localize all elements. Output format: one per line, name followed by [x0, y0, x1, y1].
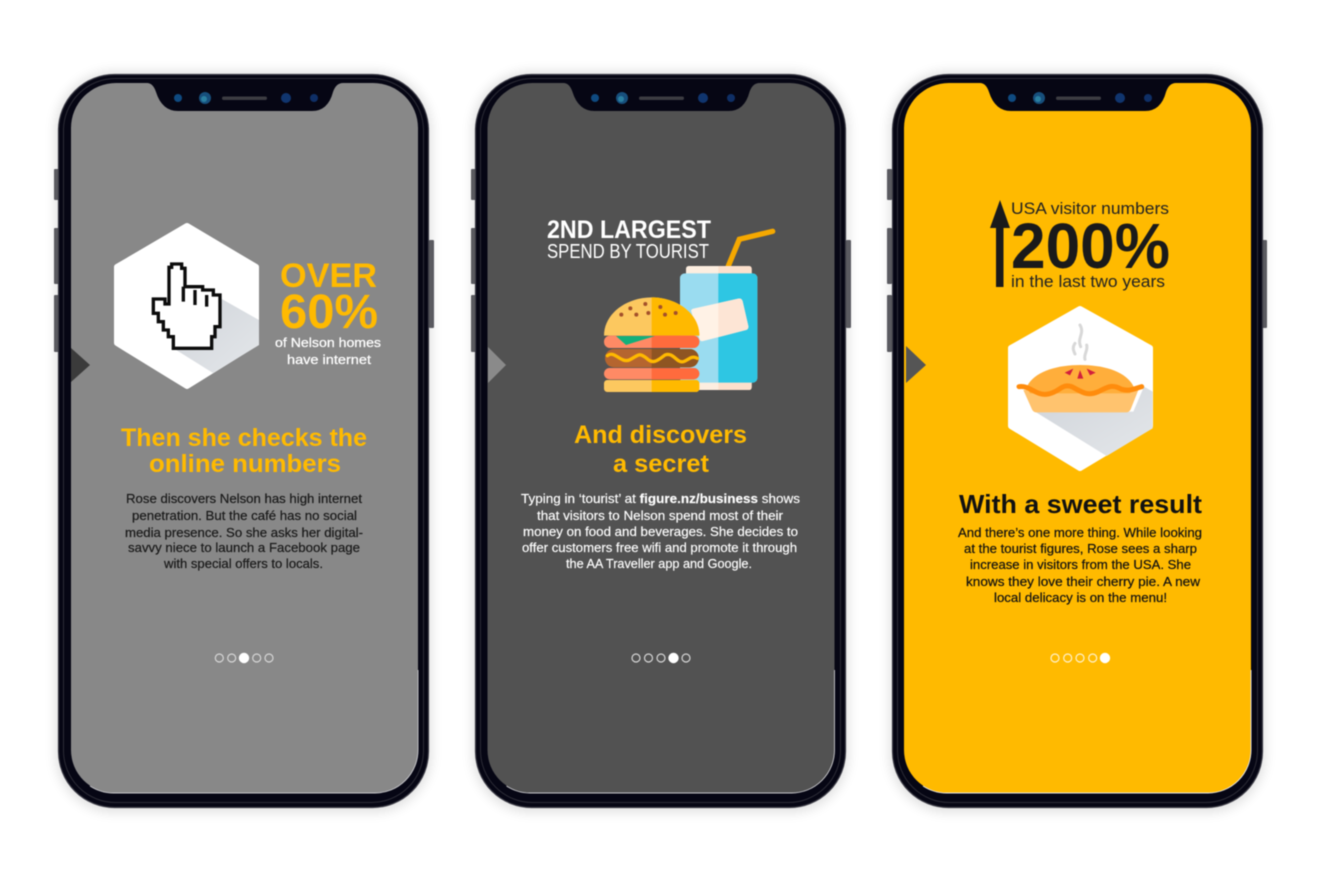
drink can: [680, 266, 757, 390]
icon: burger and drink can: [604, 231, 773, 392]
body text: [521, 492, 800, 571]
pagination dots: [215, 653, 273, 663]
heading: With a sweet result: [959, 489, 1202, 519]
stat: 2nd largest: [547, 216, 711, 263]
straw: [728, 231, 773, 266]
body text: knows they love their cherry pie. A new: [966, 575, 1201, 589]
body text: increase in visitors from the USA. She: [970, 558, 1191, 572]
side buttons: [54, 169, 434, 352]
screen: [488, 83, 834, 793]
notch cameras and speaker: [591, 92, 735, 104]
body text: [125, 492, 363, 571]
heading: online numbers: [149, 450, 341, 478]
phone frame: [476, 74, 846, 808]
icon: white hexagon with pointer hand: [117, 226, 259, 386]
heading: a secret: [613, 450, 710, 478]
body text: savvy niece to launch a Facebook page: [128, 541, 360, 555]
body text: penetration. But the café has no social: [132, 509, 357, 523]
stat: 200%: in the last two years: [1011, 272, 1165, 291]
arrow marker: [488, 347, 506, 383]
heading: [574, 421, 747, 478]
stat: over 60%: OVER: [280, 257, 377, 295]
phone frame: [58, 74, 428, 808]
phone 1: [54, 72, 434, 812]
heading: And discovers: [574, 421, 747, 449]
phone 2: [471, 72, 851, 812]
body text: with special offers to locals.: [163, 557, 323, 571]
phone 3: [887, 72, 1267, 812]
stat: 2nd largest: 2ND LARGEST: [547, 216, 711, 244]
side buttons: [471, 169, 851, 352]
heading: Then she checks the: [121, 424, 367, 452]
body text: media presence. So she asks her digital-: [125, 526, 363, 540]
notch cameras and speaker: [1008, 92, 1152, 104]
body text: local delicacy is on the menu!: [994, 591, 1167, 605]
burger: [604, 297, 699, 392]
body text: money on food and beverages. She decides to: [523, 525, 798, 539]
stat: over 60%: 60%: [280, 286, 378, 339]
body text: offer customers free wifi and promote it through: [522, 541, 797, 555]
stat: 2nd largest: SPEND BY TOURIST: [547, 241, 709, 263]
body text: [958, 526, 1202, 605]
side buttons: [887, 169, 1267, 352]
stat: over 60%: of Nelson homes: [275, 335, 382, 350]
icon: white hexagon with pie: [1011, 309, 1153, 468]
screen: [904, 83, 1251, 793]
notch cameras and speaker: [174, 92, 318, 104]
stat: 200%: USA visitor numbers: [1011, 199, 1169, 218]
pagination dots: [1051, 653, 1110, 663]
arrow marker: [906, 346, 926, 383]
body text: the AA Traveller app and Google.: [566, 557, 752, 571]
pagination dots: [632, 653, 690, 663]
screen: [71, 83, 418, 793]
icon: up arrow: [990, 200, 1010, 287]
body text: that visitors to Nelson spend most of their: [537, 509, 783, 523]
body text: Typing in ‘tourist’ at figure.nz/business shows: [521, 492, 800, 506]
stat: over 60%: have internet: [287, 352, 371, 367]
stat: over 60%: [275, 257, 382, 367]
phone frame: [892, 74, 1262, 808]
arrow marker: [71, 348, 90, 382]
body text: Rose discovers Nelson has high internet: [126, 492, 363, 506]
heading: [121, 424, 367, 478]
body text: And there’s one more thing. While looking: [958, 526, 1202, 540]
stat: 200%: 200%: [1011, 210, 1170, 282]
body text: at the tourist figures, Rose sees a sharp: [964, 542, 1197, 556]
